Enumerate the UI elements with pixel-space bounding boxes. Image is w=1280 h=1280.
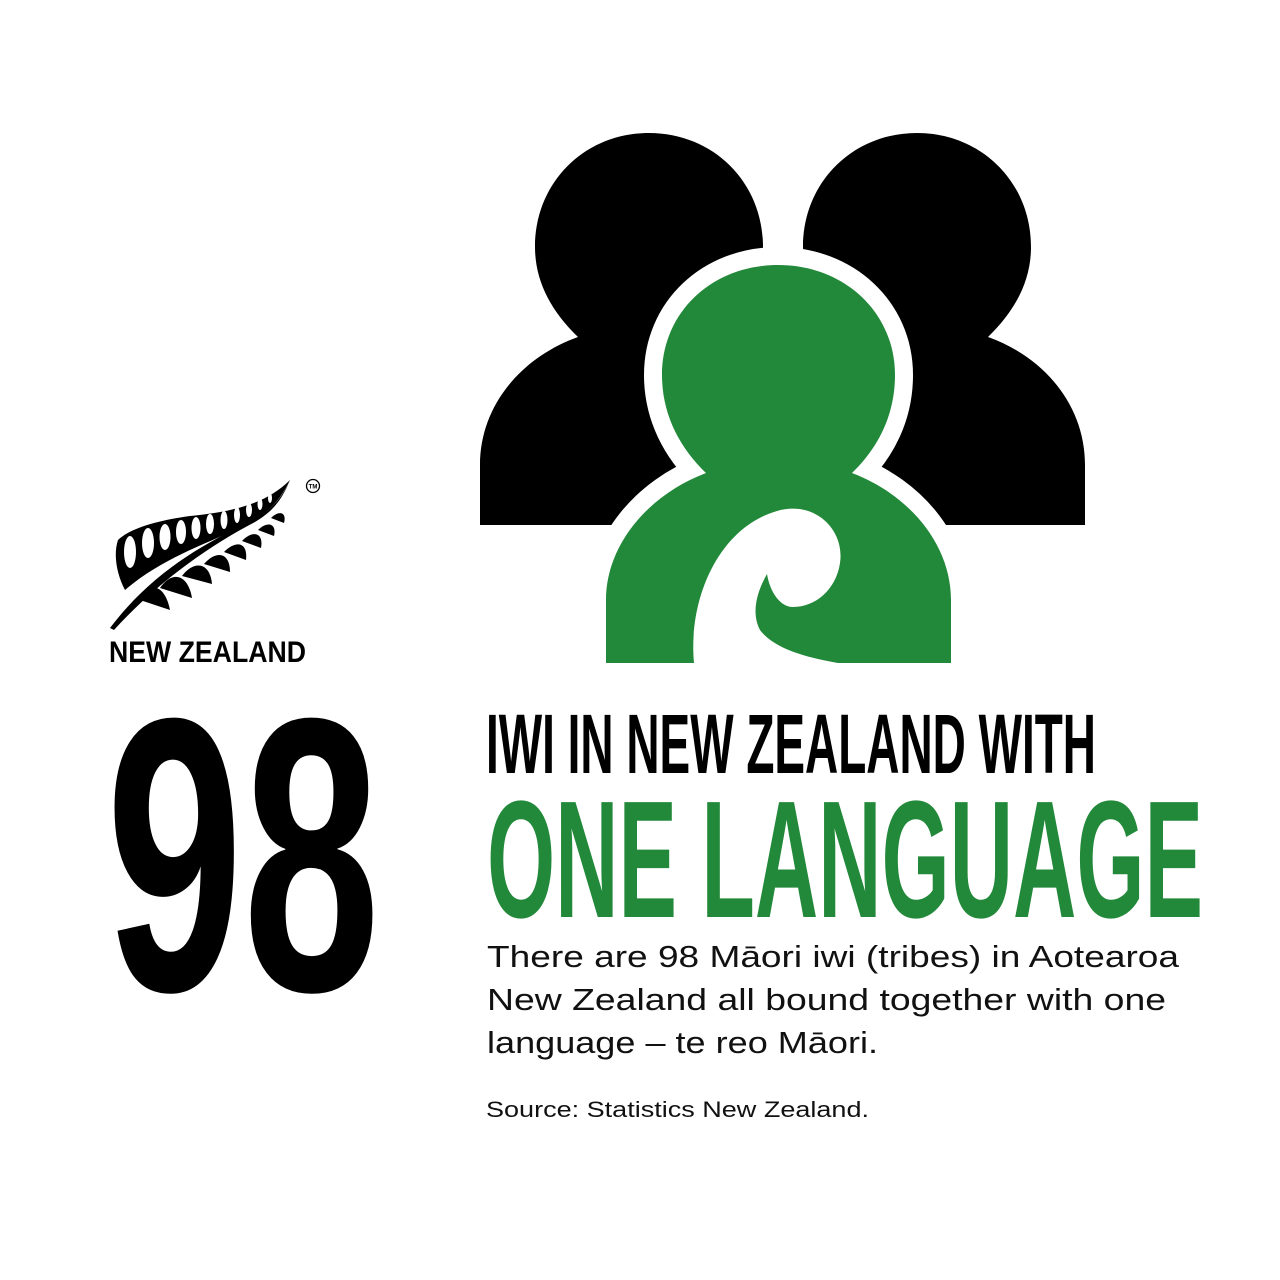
icon: left black person [480,133,763,525]
icon: fern [110,480,290,630]
icon: right black person [803,133,1085,525]
infographic canvas [110,133,1200,1117]
source note: Source: Statistics New Zealand. [486,1097,869,1122]
body text: New Zealand all bound together with one [487,982,1166,1017]
body text [487,939,1180,1060]
icon: trademark: TM [309,484,317,490]
body text: language – te reo Māori. [487,1025,878,1060]
logo text: NEW ZEALAND [109,636,306,669]
logo: silver fern New Zealand [109,480,320,669]
icon: trademark [306,480,320,492]
icon: people group with koru [480,133,1085,663]
icon: koru spiral [693,509,841,663]
body text: There are 98 Māori iwi (tribes) in Aotearoa [487,939,1180,974]
icon: green person [606,265,951,663]
big number 98: 98 [106,637,380,1073]
